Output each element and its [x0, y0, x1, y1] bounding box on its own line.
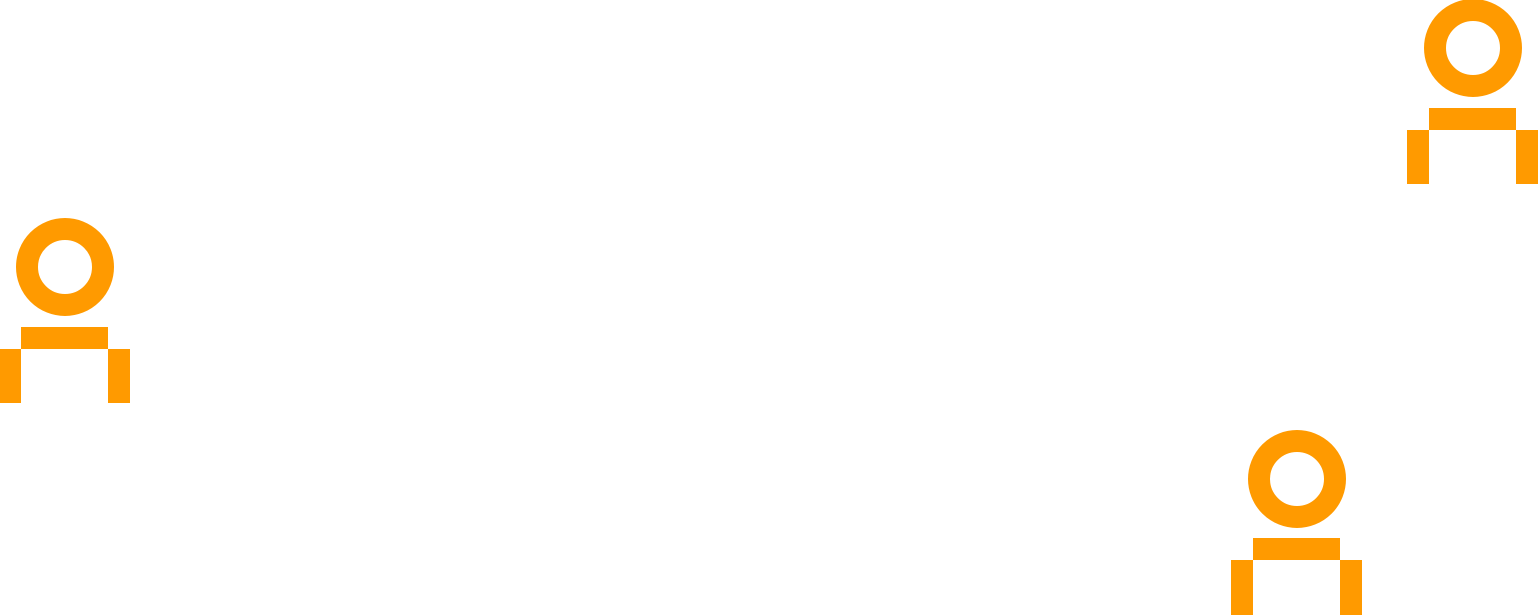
icon: person top right [1407, 10, 1538, 184]
icon: person left [0, 229, 130, 403]
icon: person bottom right [1231, 441, 1362, 615]
